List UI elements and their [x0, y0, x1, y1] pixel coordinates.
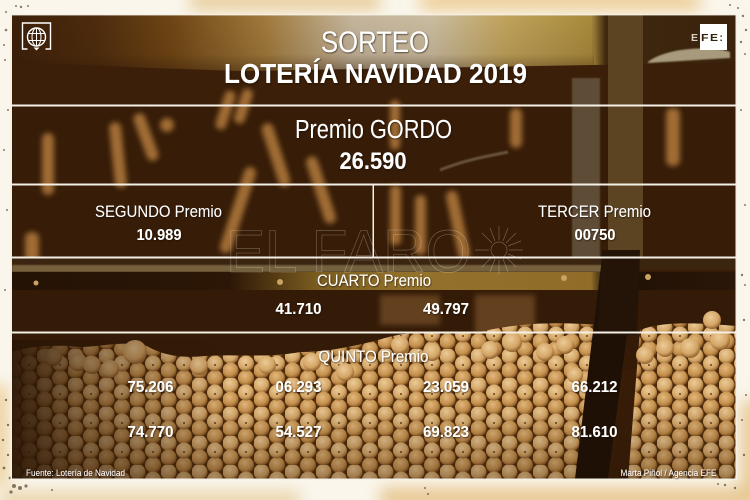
fourth prize — [276, 272, 469, 318]
fifth prize: 81.610 — [572, 424, 618, 441]
first prize: Premio GORDO — [295, 116, 452, 144]
fifth prize — [128, 348, 618, 441]
title: SORTEO — [321, 26, 429, 59]
icon: EFE logo: : — [720, 33, 723, 44]
fifth prize: 23.059 — [423, 379, 469, 396]
fourth prize: 49.797 — [423, 301, 469, 318]
fifth prize: 69.823 — [423, 424, 469, 441]
fourth prize: 41.710 — [276, 301, 322, 318]
fifth prize: 75.206 — [128, 379, 174, 396]
title — [224, 26, 527, 89]
icon: EFE logo: E — [691, 33, 698, 44]
dark foreground post — [575, 264, 627, 478]
rivets — [34, 274, 651, 286]
fifth prize: QUINTO Premio — [318, 348, 428, 366]
grey highlight top right — [648, 48, 730, 63]
upper light wall — [30, 15, 669, 71]
dark shelf below the wall — [93, 64, 608, 71]
fifth prize: 06.293 — [276, 379, 322, 396]
second prize: 10.989 — [136, 227, 182, 244]
third prize: TERCER Premio — [538, 203, 651, 221]
brass vertical post — [608, 15, 643, 258]
balls bottom shading — [27, 411, 736, 478]
title: LOTERÍA NAVIDAD 2019 — [224, 58, 527, 89]
rail highlight — [12, 265, 602, 272]
balls mass right — [628, 323, 736, 479]
fifth prize: 66.212 — [572, 379, 618, 396]
icon: EFE logo: E — [710, 33, 718, 44]
balls shading — [12, 340, 232, 479]
dark post upper part — [598, 250, 640, 335]
first prize — [295, 116, 452, 175]
fifth prize: 74.770 — [128, 424, 174, 441]
glass arc reflection — [440, 152, 508, 170]
icon: EFE logo: F — [701, 33, 708, 44]
glass area below band — [106, 290, 348, 350]
third prize: 00750 — [574, 227, 616, 244]
icon: Loterías globe logo — [22, 23, 50, 50]
larger balls on top edge — [44, 311, 730, 383]
grey glass reflection — [572, 78, 600, 258]
fourth prize: CUARTO Premio — [317, 272, 431, 290]
blurred lottery balls falling — [22, 86, 684, 256]
first prize: 26.590 — [340, 148, 406, 175]
source credit: Fuente: Lotería de Navidad — [26, 468, 125, 479]
brass rail — [12, 258, 601, 264]
wall fade — [72, 34, 594, 71]
second prize: SEGUNDO Premio — [95, 203, 222, 221]
third prize — [538, 203, 651, 244]
icon: EFE logo — [691, 24, 727, 50]
gold band — [12, 272, 736, 290]
watermark sun — [475, 226, 523, 274]
watermark: El Faro: EL FARO — [226, 218, 471, 285]
second prize — [95, 203, 222, 244]
balls mass — [12, 323, 606, 479]
fifth prize: 54.527 — [276, 424, 322, 441]
photo credit: Marta Piñol / Agencia EFE — [620, 468, 716, 479]
